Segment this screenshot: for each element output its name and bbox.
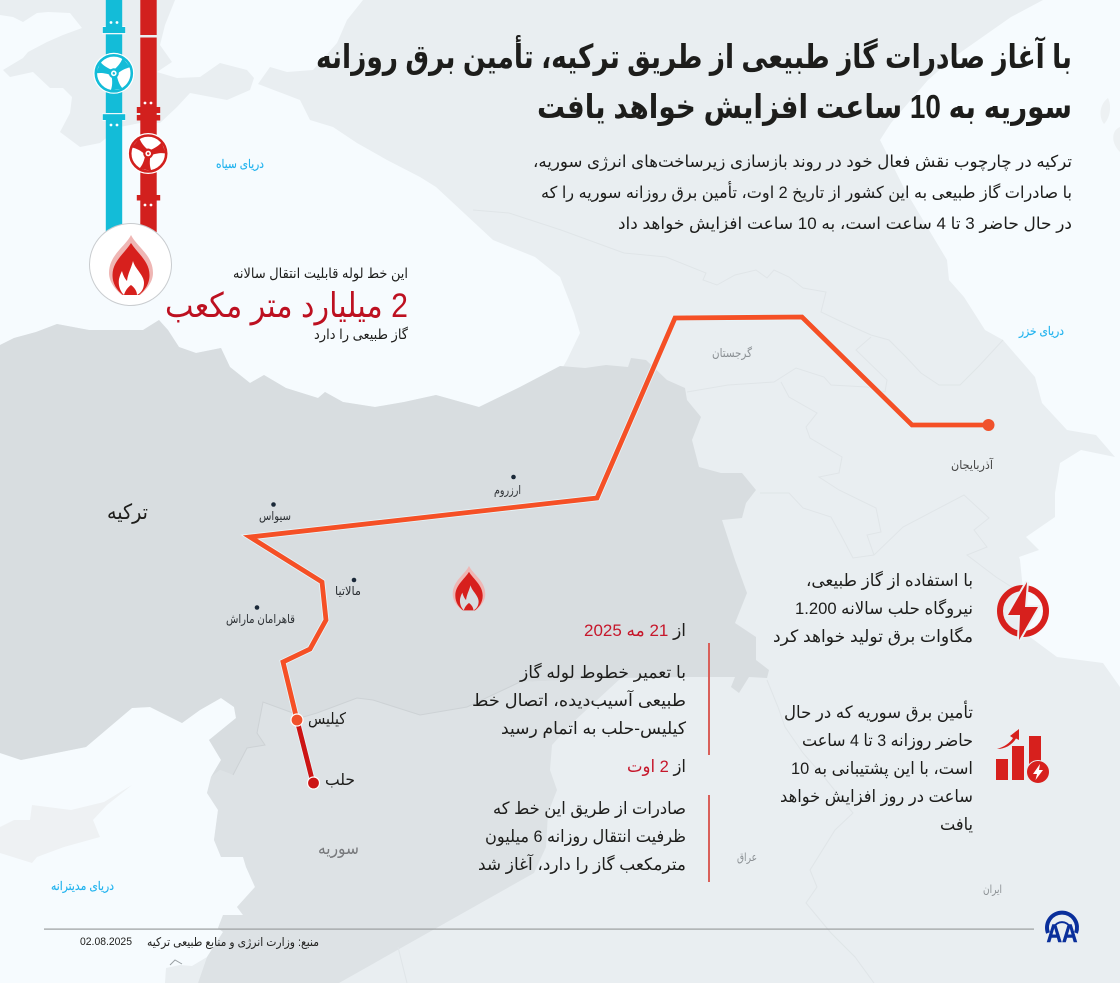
city labels: قاهرامان ماراش — [226, 612, 295, 627]
logo: AA: AA — [1046, 920, 1078, 948]
callout: pipeline capacity: این خط لوله قابلیت انتقال سالانه — [233, 265, 408, 282]
text block: from 2 August: مترمکعب گاز را دارد، آغاز شد — [478, 853, 686, 874]
intro text: با صادرات گاز طبیعی به این کشور از تاریخ 2 اوت، تأمین برق روزانه سوریه را که — [541, 181, 1072, 203]
icon: small flame — [453, 566, 485, 610]
callout: pipeline capacity — [165, 265, 408, 343]
text block: power plant: نیروگاه حلب سالانه 1.200 — [795, 598, 973, 618]
country labels: آذربایجان — [951, 457, 994, 473]
sea: Caspian Sea — [880, 0, 1120, 687]
city labels: کیلیس — [308, 711, 346, 729]
icon: blue pipe with valve — [93, 0, 134, 232]
intro text — [533, 153, 1072, 234]
text block: from 21 May: طبیعی آسیب‌دیده، اتصال خط — [472, 689, 686, 710]
pipeline route — [250, 317, 994, 789]
text block: electricity supply: حاضر روزانه 3 تا 4 ساعت — [802, 731, 973, 750]
icon: flame badge — [90, 224, 172, 306]
country labels: ایران — [983, 884, 1002, 897]
sea labels: دریای خزر — [1018, 324, 1064, 339]
text block: electricity supply: ساعت در روز افزایش خواهد — [780, 787, 973, 806]
land: Turkey — [0, 320, 769, 777]
land: Syria — [198, 678, 621, 983]
icon: red pipe with valve — [128, 0, 169, 232]
icon: rising bars — [996, 729, 1050, 784]
country labels: سوریه — [318, 839, 359, 858]
land: Lebanon coast — [165, 957, 207, 983]
icon: power bolt — [1000, 582, 1046, 640]
text block: electricity supply: تأمین برق سوریه که در حال — [784, 700, 973, 722]
title: سوریه به 10 ساعت افزایش خواهد یافت — [537, 88, 1072, 127]
source line: 02.08.2025 — [80, 936, 132, 948]
sea labels — [51, 157, 1064, 894]
country borders — [398, 210, 1021, 983]
sea: Mediterranean — [0, 698, 255, 983]
country labels: ترکیه — [107, 501, 148, 524]
text block: power plant — [773, 570, 973, 646]
text block: from 21 May: کیلیس-حلب به اتمام رسید — [501, 719, 687, 738]
text block: from 21 May: با تعمیر خطوط لوله گاز — [519, 662, 686, 682]
callout: pipeline capacity: 2 میلیارد متر مکعب — [165, 287, 408, 326]
country labels: گرجستان — [712, 346, 752, 361]
text block: electricity supply: یافت — [940, 815, 973, 834]
city labels: ارزروم — [494, 483, 521, 498]
intro text: ترکیه در چارچوب نقش فعال خود در روند بازسازی زیرساخت‌های انرژی سوریه، — [533, 153, 1072, 172]
sea labels: دریای مدیترانه — [51, 879, 114, 894]
title — [316, 35, 1072, 127]
text block: from 2 August: از 2 اوت — [627, 757, 686, 776]
city labels: حلب — [325, 772, 355, 789]
text block: electricity supply — [780, 700, 973, 834]
land: Cyprus — [0, 785, 132, 863]
city labels — [226, 475, 521, 789]
text block: from 2 August — [478, 757, 710, 882]
text block: power plant: با استفاده از گاز طبیعی، — [806, 570, 973, 590]
text block: from 21 May — [472, 621, 710, 755]
callout: pipeline capacity: گاز طبیعی را دارد — [314, 326, 408, 343]
text block: from 2 August: ظرفیت انتقال روزانه 6 میلیون — [485, 827, 686, 846]
city labels: مالاتیا — [335, 584, 361, 598]
text block: power plant: مگاوات برق تولید خواهد کرد — [773, 626, 973, 646]
source line — [80, 935, 319, 950]
intro text: در حال حاضر 3 تا 4 ساعت است، به 10 ساعت افزایش خواهد داد — [618, 215, 1072, 234]
text block: from 2 August: صادرات از طریق این خط که — [493, 799, 686, 818]
text block: from 21 May: از 21 مه 2025 — [584, 621, 686, 640]
city labels: سیواس — [259, 509, 291, 524]
country labels — [107, 346, 1002, 897]
sea labels: دریای سیاه — [216, 157, 264, 172]
footer rule — [44, 928, 1034, 930]
text block: electricity supply: است، با این پشتیبانی به 10 — [791, 759, 973, 779]
sea: Black Sea — [0, 0, 580, 407]
small island shapes — [1101, 98, 1120, 152]
source line: منبع: وزارت انرژی و منابع طبیعی ترکیه — [147, 935, 319, 950]
country labels: عراق — [737, 852, 757, 865]
